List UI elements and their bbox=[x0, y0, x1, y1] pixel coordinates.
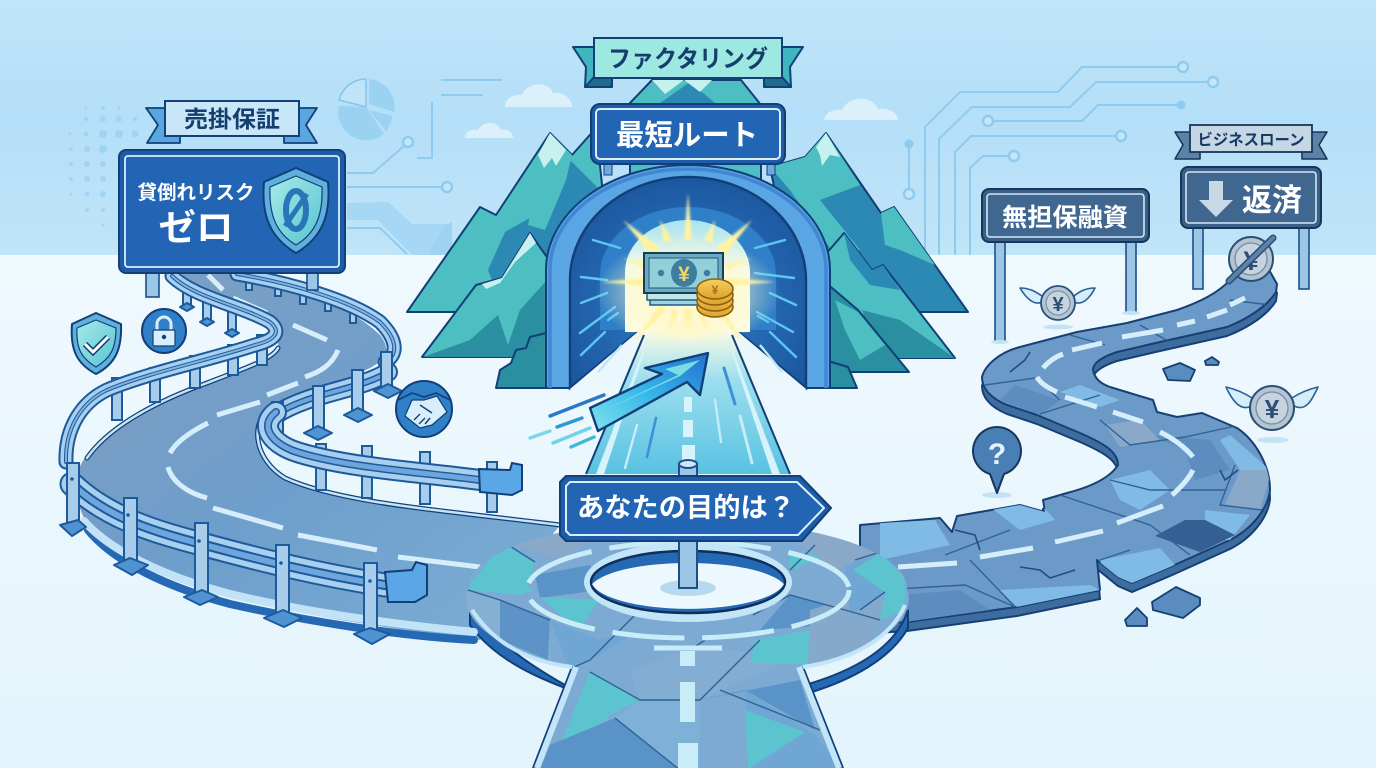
sign: 返済 bbox=[1181, 167, 1321, 289]
far rail bbox=[237, 274, 394, 362]
left guardrail bbox=[60, 276, 474, 644]
circuit lines left bbox=[347, 80, 502, 255]
icon: handshake bbox=[396, 381, 452, 437]
sign: 貸倒れリスク ゼロ bbox=[119, 150, 345, 297]
center island bbox=[584, 542, 792, 622]
light glow bbox=[596, 193, 780, 357]
sky background bbox=[0, 0, 1376, 256]
sign: 貸倒れリスク ゼロ: ゼロ bbox=[158, 207, 234, 248]
sign: 最短ルート: 最短ルート bbox=[616, 119, 758, 152]
sign: あなたの目的は？: あなたの目的は？ bbox=[577, 493, 795, 523]
road edge highlight bbox=[258, 410, 560, 525]
banner: ビジネスローン bbox=[1175, 125, 1327, 159]
bush: left bbox=[496, 333, 546, 388]
hub outline and light kerb bbox=[533, 667, 572, 768]
sign: あなたの目的は？ bbox=[560, 476, 831, 541]
hub surface bbox=[466, 520, 909, 768]
icon: winged coin left bbox=[1020, 286, 1095, 330]
mountain: back peak bbox=[630, 80, 761, 180]
lane dashes bbox=[898, 298, 1245, 567]
icon: down arrow bbox=[1199, 181, 1233, 217]
road surface bbox=[860, 268, 1277, 625]
icon: check shield bbox=[72, 313, 121, 374]
speed lines bbox=[580, 240, 796, 372]
guardrail posts bbox=[60, 463, 390, 644]
icon: question pin bbox=[973, 427, 1021, 498]
banner: 売掛保証: 売掛保証 bbox=[184, 106, 280, 132]
sign: 無担保融資 bbox=[982, 189, 1149, 344]
lower rail bbox=[268, 412, 480, 480]
icon: cash and coins: ¥ bbox=[678, 263, 690, 286]
near rail bbox=[72, 484, 385, 585]
lane dashes bbox=[168, 275, 480, 567]
road: broken road bbox=[860, 268, 1277, 634]
roundabout bbox=[460, 520, 909, 768]
debris: road fragments bbox=[1125, 357, 1219, 626]
icon: blue arrow bbox=[530, 353, 708, 447]
banner: ファクタリング: ファクタリング bbox=[608, 45, 768, 73]
lane ring bbox=[527, 542, 849, 638]
road thickness bbox=[860, 277, 1277, 634]
icon: zero shield bbox=[263, 168, 329, 253]
banner: ビジネスローン: ビジネスローン bbox=[1198, 130, 1304, 149]
icon: cash and coins: ¥ bbox=[712, 283, 719, 297]
road surface bbox=[76, 272, 560, 640]
sign: 返済: 返済 bbox=[1242, 183, 1302, 218]
icon: crossed coin: ¥ bbox=[1243, 246, 1259, 276]
mountain: right front bbox=[825, 233, 955, 358]
road tiles bbox=[880, 300, 1272, 622]
ground bbox=[0, 255, 1376, 768]
far fence posts bbox=[112, 283, 267, 420]
mountain: left big bbox=[407, 128, 610, 312]
sign: 貸倒れリスク ゼロ: 貸倒れリスク bbox=[138, 181, 254, 204]
mountain: left front bbox=[422, 233, 556, 357]
sign: 最短ルート bbox=[591, 104, 785, 175]
mosaic patches bbox=[460, 528, 905, 768]
middle fence bbox=[275, 372, 388, 415]
clouds bbox=[465, 84, 898, 138]
lower posts bbox=[316, 444, 497, 512]
mountains bbox=[407, 80, 968, 388]
far posts bbox=[246, 276, 356, 323]
bush: right bbox=[825, 360, 857, 388]
icon: winged coin right bbox=[1226, 386, 1318, 443]
ground floor at mouth bbox=[570, 325, 806, 389]
lane dashes bbox=[682, 397, 695, 462]
far rail left bbox=[66, 276, 276, 462]
icon: question pin: ? bbox=[988, 438, 1006, 471]
sign: 無担保融資: 無担保融資 bbox=[1002, 204, 1128, 232]
tunnel interior bbox=[570, 177, 806, 388]
roundabout skirt bbox=[470, 600, 908, 695]
dotted pattern bbox=[68, 106, 138, 226]
mountain: right lower bbox=[825, 282, 909, 372]
road skirt bbox=[88, 530, 474, 640]
mountain: right big bbox=[770, 133, 968, 312]
road streaks bbox=[625, 368, 752, 468]
signpost pole bbox=[679, 460, 697, 588]
icon: cash and coins bbox=[644, 253, 733, 317]
right guardrail bbox=[237, 274, 522, 512]
rail end cap bbox=[385, 562, 427, 602]
circuit lines right bbox=[904, 62, 1218, 255]
road to tunnel bbox=[586, 316, 790, 474]
banner: ファクタリング bbox=[573, 38, 803, 87]
icon: crossed coin bbox=[1229, 237, 1273, 281]
road: left guarded road bbox=[76, 272, 560, 640]
icon: padlock bbox=[142, 309, 186, 353]
icon: winged coin right: ¥ bbox=[1265, 394, 1280, 424]
banner: 売掛保証 bbox=[146, 101, 317, 143]
icon: winged coin left: ¥ bbox=[1052, 294, 1064, 316]
rail end cap bbox=[479, 463, 522, 495]
tunnel arch frame bbox=[546, 165, 830, 388]
tunnel bbox=[546, 165, 830, 389]
entry lines bbox=[654, 646, 722, 650]
icon: pie chart bbox=[338, 79, 394, 140]
